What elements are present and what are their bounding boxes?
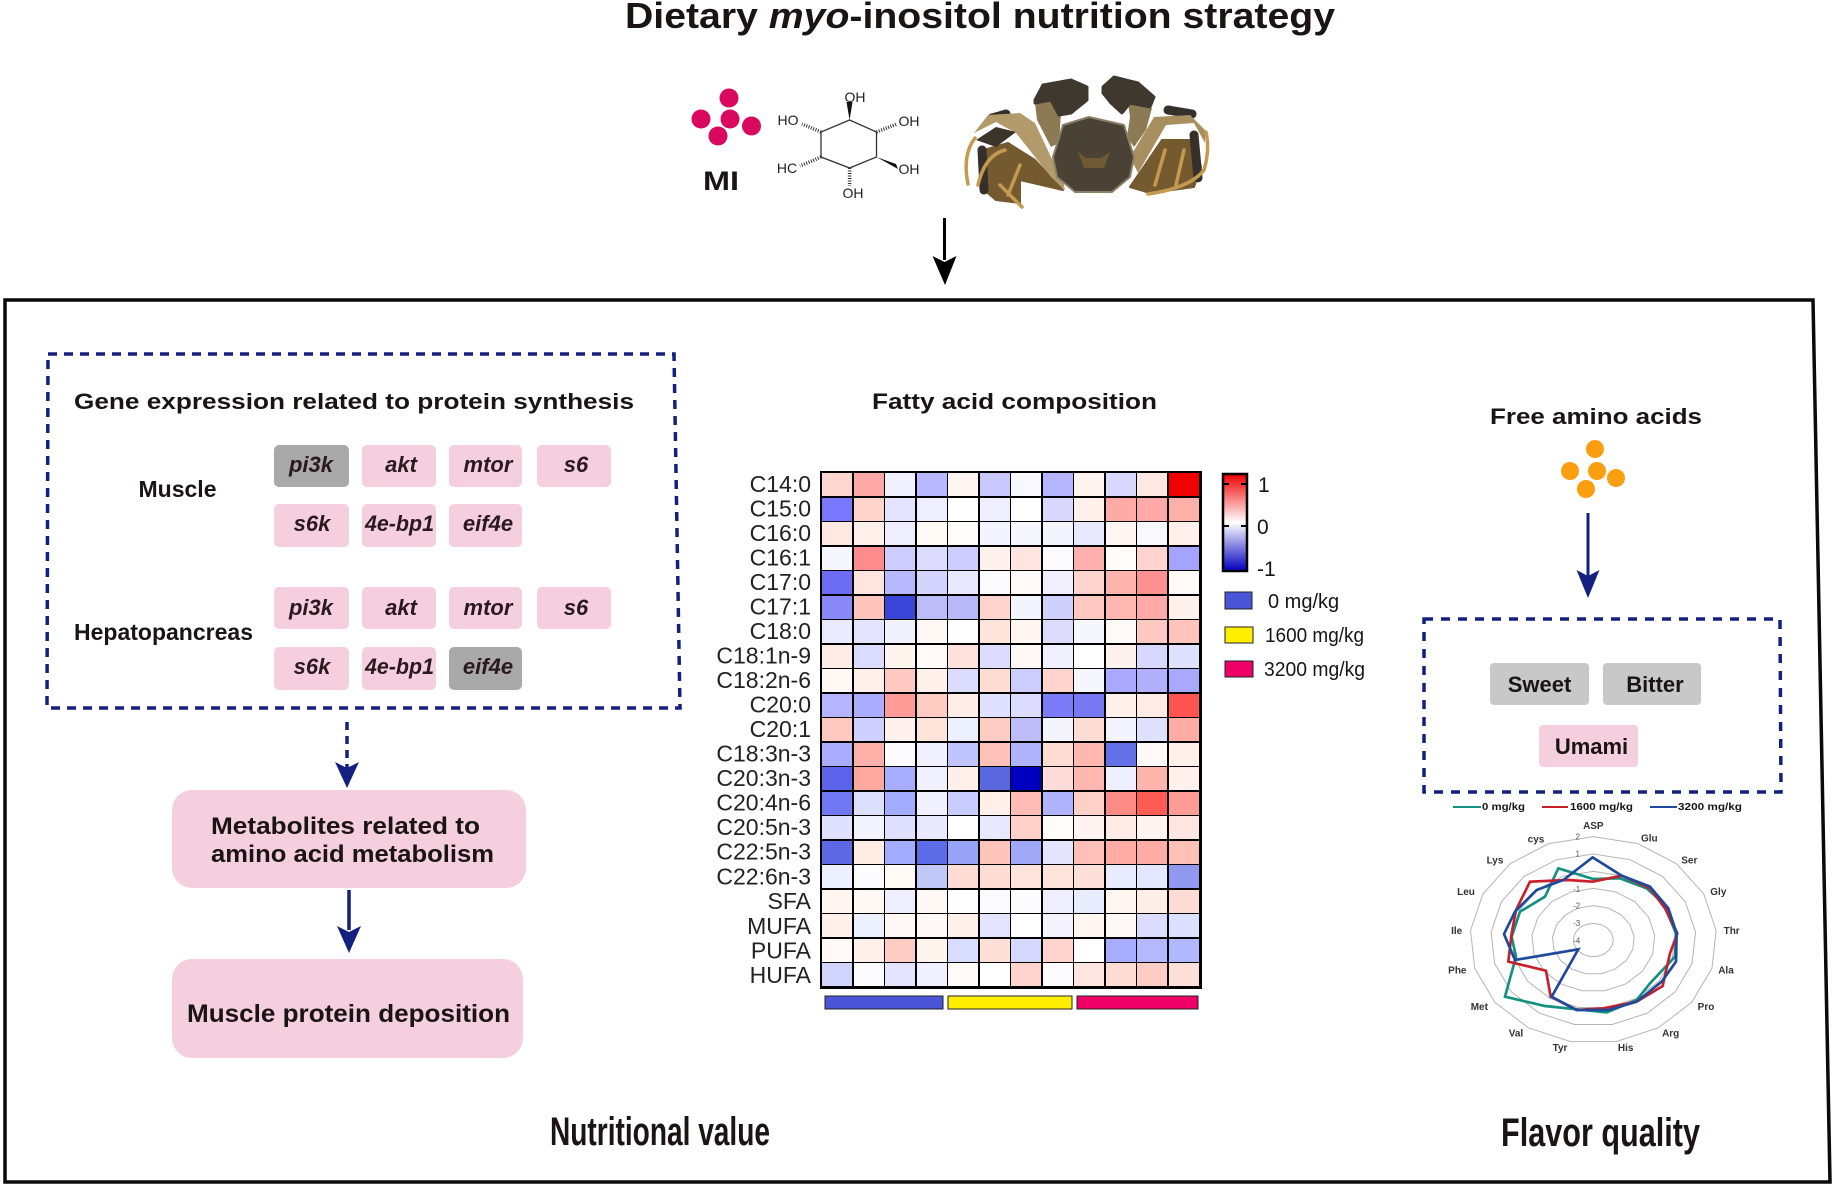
radar chart: Arg — [1662, 1029, 1679, 1040]
heatmap row labels: PUFA — [751, 938, 812, 964]
hepatopancreas gene chips — [274, 587, 611, 690]
icon: myo-inositol chemical structure: OH — [898, 113, 920, 129]
radar chart: Lys — [1487, 855, 1504, 866]
panel: main outer frame — [5, 300, 1830, 1182]
heading: gene expression: Gene expression related to protein synthesis — [74, 389, 634, 414]
heatmap row labels: C18:2n-6 — [716, 667, 811, 693]
radar chart: Gly — [1710, 887, 1727, 898]
icon: mitten crab — [966, 77, 1208, 207]
muscle gene chips: akt — [385, 452, 419, 477]
box: muscle protein deposition: Muscle protein deposition — [187, 1000, 510, 1028]
arrow: dashed gene to metabolites — [335, 722, 359, 788]
heatmap row labels: C14:0 — [750, 471, 811, 497]
icon: amino acid dots — [1561, 440, 1625, 498]
heading: flavor quality: Flavor quality — [1501, 1111, 1701, 1155]
icon: MI molecule dots — [692, 88, 761, 146]
panel: taste dashed box — [1424, 619, 1781, 792]
heatmap colour scale: 1 — [1258, 474, 1270, 497]
icon: myo-inositol chemical structure: OH — [898, 161, 920, 177]
chip: bitter: Bitter — [1626, 672, 1684, 697]
radar chart: Leu — [1457, 887, 1475, 898]
icon: myo-inositol chemical structure: HC — [777, 160, 797, 176]
box: metabolites: amino acid metabolism — [211, 841, 494, 868]
heatmap row labels: C17:0 — [750, 569, 811, 595]
label: Hepatopancreas: Hepatopancreas — [74, 619, 253, 645]
hepatopancreas gene chips: s6k — [294, 654, 332, 679]
muscle gene chips: s6 — [564, 452, 589, 477]
heatmap row labels: SFA — [768, 888, 812, 914]
chip: bitter — [1603, 663, 1701, 705]
radar chart: Ser — [1681, 855, 1697, 866]
muscle gene chips: s6k — [294, 511, 332, 536]
heatmap group colour bars — [825, 996, 1198, 1009]
radar chart: Phe — [1448, 965, 1467, 976]
radar chart legend: 0 mg/kg — [1482, 802, 1525, 813]
chip: sweet: Sweet — [1508, 672, 1572, 697]
heatmap row labels: C20:4n-6 — [716, 790, 811, 816]
hepatopancreas gene chips: pi3k — [288, 595, 335, 620]
icon: myo-inositol chemical structure: OH — [842, 185, 864, 201]
hepatopancreas gene chips: mtor — [464, 595, 514, 620]
arrow: strategy to panel — [932, 218, 956, 285]
legend: dose groups: 0 mg/kg — [1268, 591, 1339, 613]
heatmap row labels: C15:0 — [750, 496, 811, 522]
radar chart legend — [1453, 802, 1742, 813]
heatmap colour scale — [1223, 474, 1276, 581]
heatmap row labels: C20:0 — [750, 692, 811, 718]
label: Muscle: Muscle — [138, 476, 216, 502]
radar chart: Pro — [1698, 1002, 1714, 1013]
arrow: amino acids to flavor box — [1576, 513, 1600, 598]
heatmap row labels: C17:1 — [750, 594, 811, 620]
legend: dose groups: 1600 mg/kg — [1265, 625, 1364, 647]
legend: dose groups — [1225, 591, 1365, 681]
radar chart — [1448, 821, 1740, 1054]
muscle gene chips: 4e-bp1 — [364, 511, 434, 536]
muscle gene chips: pi3k — [288, 452, 335, 477]
box: metabolites — [172, 790, 526, 888]
heatmap row labels: C16:0 — [750, 520, 811, 546]
heatmap row labels: C18:3n-3 — [716, 740, 811, 766]
heatmap: fatty acid composition — [820, 471, 1202, 989]
MI label: MI — [703, 166, 739, 196]
heatmap row labels: C20:5n-3 — [716, 814, 811, 840]
icon: myo-inositol chemical structure: OH — [844, 89, 866, 105]
hepatopancreas gene chips: eif4e — [463, 654, 513, 679]
panel: gene expression dashed box — [47, 354, 680, 708]
heading: free amino acids: Free amino acids — [1490, 404, 1702, 429]
radar chart: Met — [1471, 1002, 1489, 1013]
radar chart: ASP — [1583, 821, 1604, 832]
heatmap colour scale: 0 — [1257, 516, 1269, 539]
legend: dose groups: 3200 mg/kg — [1264, 659, 1365, 681]
heatmap colour scale: -1 — [1257, 558, 1276, 581]
heatmap row labels: C20:1 — [750, 716, 811, 742]
arrow: metabolites to deposition — [337, 890, 361, 953]
heatmap row labels: C18:1n-9 — [716, 642, 811, 668]
radar chart: Glu — [1641, 834, 1658, 845]
radar chart legend: 1600 mg/kg — [1570, 802, 1633, 813]
heading: fatty acid composition: Fatty acid composition — [872, 389, 1157, 414]
radar chart: -1 — [1573, 885, 1581, 894]
heatmap row labels: MUFA — [747, 913, 812, 939]
icon: myo-inositol chemical structure: HO — [778, 112, 799, 128]
heatmap row labels: C18:0 — [750, 618, 811, 644]
hepatopancreas gene chips: akt — [385, 595, 419, 620]
heatmap row labels: HUFA — [750, 962, 812, 988]
icon: myo-inositol chemical structure — [777, 89, 920, 201]
radar chart: His — [1618, 1043, 1634, 1054]
heatmap row labels: C20:3n-3 — [716, 765, 811, 791]
heatmap row labels: C16:1 — [750, 544, 811, 570]
radar chart: 2 — [1575, 832, 1580, 841]
hepatopancreas gene chips: 4e-bp1 — [364, 654, 434, 679]
chip: sweet — [1490, 663, 1589, 705]
heatmap row labels — [716, 471, 812, 988]
box: metabolites: Metabolites related to — [211, 813, 480, 840]
muscle gene chips: mtor — [464, 452, 514, 477]
chip: umami: Umami — [1555, 734, 1628, 759]
radar chart: Thr — [1724, 926, 1740, 937]
radar chart: -2 — [1573, 902, 1581, 911]
radar chart: Ala — [1718, 965, 1734, 976]
radar chart: Tyr — [1553, 1043, 1568, 1054]
radar chart: cys — [1528, 834, 1545, 845]
radar chart: 1 — [1575, 850, 1580, 859]
hepatopancreas gene chips: s6 — [564, 595, 589, 620]
radar chart: -3 — [1573, 919, 1581, 928]
heatmap row labels: C22:5n-3 — [716, 838, 811, 864]
chip: umami — [1539, 725, 1638, 767]
heatmap row labels: C22:6n-3 — [716, 864, 811, 890]
muscle gene chips — [274, 445, 611, 547]
radar chart: Val — [1509, 1029, 1523, 1040]
heading: nutritional value: Nutritional value — [550, 1110, 770, 1154]
muscle gene chips: eif4e — [463, 511, 513, 536]
radar chart: Ile — [1451, 926, 1463, 937]
box: muscle protein deposition — [172, 959, 523, 1058]
radar chart: -4 — [1573, 936, 1581, 945]
radar chart legend: 3200 mg/kg — [1678, 802, 1742, 813]
